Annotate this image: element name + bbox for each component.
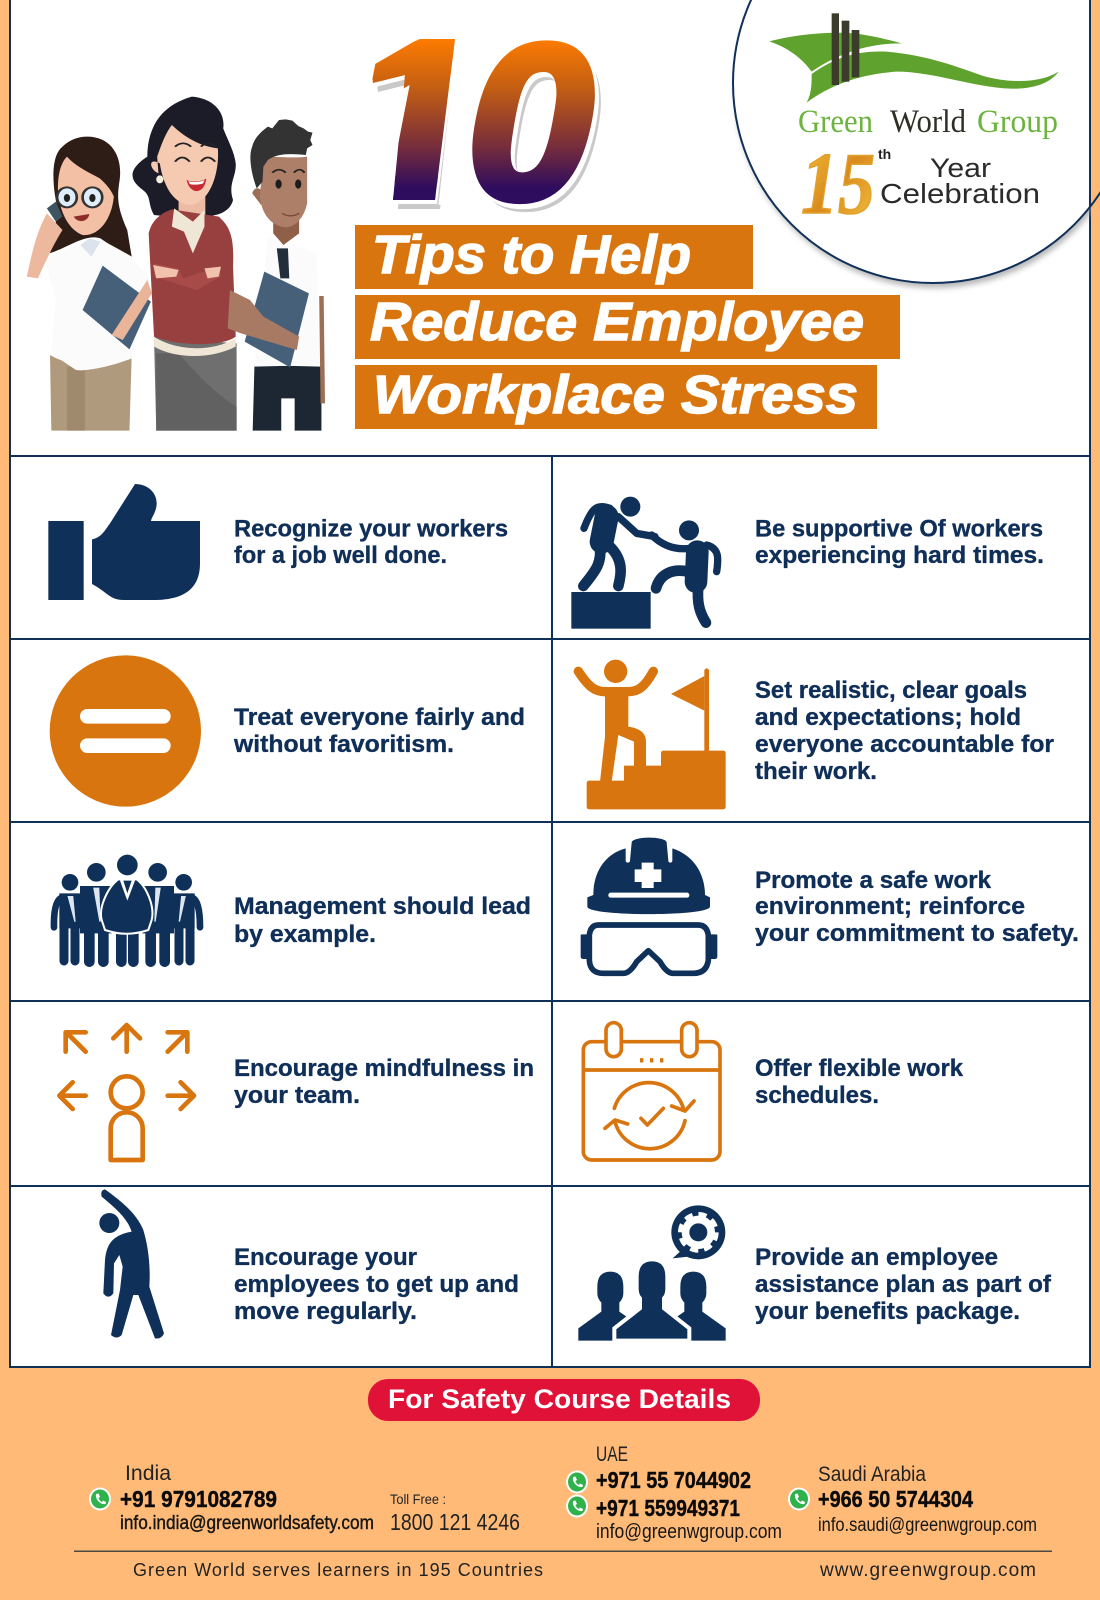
heading banner line 1: Tips to Help [372, 225, 691, 285]
logo badge [733, 0, 1100, 288]
contact: UAE: info@greenwgroup.com [596, 1521, 782, 1543]
icon: climber with flag [578, 660, 726, 809]
contact: toll free [390, 1491, 520, 1535]
tip 9 text: employees to get up and [234, 1271, 519, 1298]
woman in red blazer [133, 97, 237, 431]
tip 8 text: schedules. [755, 1082, 879, 1109]
logo wordmark [798, 104, 1058, 140]
icon: mindfulness person with arrows [59, 1025, 194, 1160]
tip 9 text: Encourage your [234, 1244, 417, 1271]
tip 1 text: for a job well done. [234, 542, 447, 569]
contact: Saudi Arabia [788, 1463, 1037, 1536]
contact: UAE [566, 1443, 782, 1543]
tip 4 text: everyone accountable for [755, 731, 1054, 758]
15th year celebration: th [878, 146, 891, 162]
digit 1: 1 [351, 0, 480, 252]
call to action pill [368, 1379, 760, 1421]
contact: toll free: Toll Free : [390, 1491, 446, 1507]
digit 1 [372, 39, 455, 209]
contact: UAE: UAE [596, 1443, 628, 1466]
icon: helping hand [571, 497, 718, 629]
tip 7 text [234, 1055, 534, 1109]
contact: India: India [125, 1462, 171, 1485]
15th year celebration [801, 136, 1040, 233]
tip 9 text: move regularly. [234, 1298, 417, 1325]
icon: flexible schedule calendar [583, 1023, 720, 1160]
tip 3 text: without favoritism. [233, 731, 454, 758]
woman with glasses [27, 137, 152, 431]
icon: thumbs up [48, 484, 200, 600]
tip 7 text: your team. [234, 1082, 360, 1109]
contact: UAE: +971 55 7044902 [596, 1467, 751, 1493]
contact: Saudi Arabia: Saudi Arabia [818, 1463, 926, 1486]
tip 10 text: Provide an employee [755, 1244, 998, 1271]
logo wordmark: Group [977, 104, 1058, 140]
digit 0: 0 [467, 0, 593, 245]
man with tie [228, 119, 325, 431]
logo wordmark: World [890, 104, 966, 140]
tip 8 text [755, 1055, 964, 1109]
icon: whatsapp India [89, 1488, 111, 1510]
icon: stretching person [99, 1189, 164, 1338]
logo wordmark: Green [798, 104, 873, 140]
15th year celebration: 15 [801, 136, 875, 233]
tip 5 text: Management should lead [234, 893, 531, 920]
contact: Saudi Arabia: +966 50 5744304 [818, 1486, 973, 1512]
tip 4 text: their work. [755, 758, 877, 785]
digit 1: 1 [353, 0, 482, 256]
contact: India [89, 1462, 374, 1534]
tip 5 text: by example. [234, 921, 376, 948]
heading number: 10 [372, 39, 601, 212]
digit 1: 1 [356, 2, 485, 261]
contact: UAE: +971 559949371 [596, 1495, 740, 1521]
icon: whatsapp UAE 2 [566, 1494, 588, 1518]
tip 6 text: Promote a safe work [755, 867, 992, 894]
tip 10 text: assistance plan as part of [755, 1271, 1052, 1298]
tip 4 text [755, 677, 1054, 785]
tip 3 text [233, 704, 525, 758]
15th year celebration: Celebration [880, 178, 1040, 209]
call to action pill: For Safety Course Details [388, 1384, 731, 1414]
contact: India: info.india@greenworldsafety.com [120, 1513, 374, 1534]
heading banner line 2: Reduce Employee [370, 292, 864, 352]
tip 10 text: your benefits package. [755, 1298, 1020, 1325]
tip 8 text: Offer flexible work [755, 1055, 964, 1082]
tip 4 text: Set realistic, clear goals [755, 677, 1027, 704]
contact: India: +91 9791082789 [120, 1486, 277, 1512]
tip 2 text: Be supportive Of workers [755, 516, 1043, 542]
tip 6 text: environment; reinforce [755, 893, 1025, 920]
tip 6 text: your commitment to safety. [755, 920, 1079, 947]
tip 7 text: Encourage mindfulness in [234, 1055, 534, 1082]
icon: whatsapp UAE 1 [566, 1470, 588, 1494]
tip 9 text [234, 1244, 519, 1325]
tip 1 text: Recognize your workers [234, 516, 508, 542]
tip 3 text: Treat everyone fairly and [234, 704, 525, 731]
contact: Saudi Arabia: info.saudi@greenwgroup.com [818, 1515, 1037, 1536]
tip 2 text [755, 516, 1044, 569]
digit 0: 0 [473, 7, 599, 253]
icon: management team [54, 855, 200, 962]
tip 5 text [234, 893, 531, 948]
icon: employee group with gear bubble [578, 1205, 726, 1341]
footer website: www.greenwgroup.com [819, 1560, 1036, 1581]
tip 2 text: experiencing hard times. [755, 542, 1044, 569]
contact: toll free: 1800 121 4246 [390, 1509, 520, 1535]
icon: whatsapp Saudi [788, 1488, 810, 1510]
tip 4 text: and expectations; hold [755, 704, 1021, 731]
illustration: three office workers [27, 97, 325, 431]
icon: safety helmet and goggles [581, 838, 717, 973]
tip 6 text [755, 867, 1079, 947]
15th year celebration: Year [930, 153, 991, 183]
logo mark [769, 13, 1059, 103]
icon: equals circle [50, 655, 201, 807]
tip 1 text [234, 516, 508, 569]
heading banner line 3: Workplace Stress [373, 365, 858, 425]
tip 10 text [755, 1244, 1052, 1325]
footer tagline: Green World serves learners in 195 Countries [133, 1560, 543, 1580]
digit 0: 0 [470, 3, 596, 249]
